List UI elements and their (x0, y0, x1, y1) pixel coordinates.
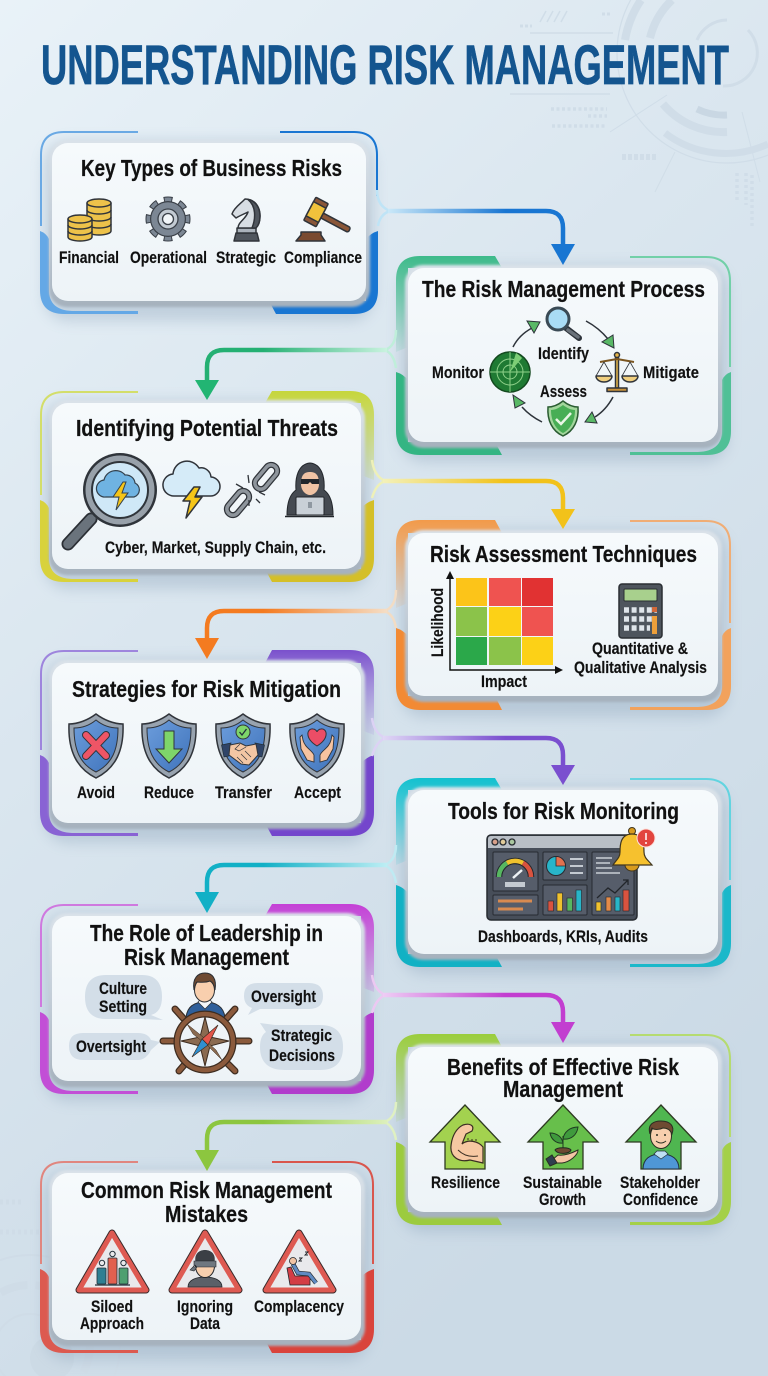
icon: magnifier (547, 308, 579, 338)
heading: Identifying Potential Threats (76, 415, 338, 441)
panel: common risk management mistakes (40, 1162, 374, 1360)
label: Compliance (284, 248, 362, 267)
heading: Management (503, 1076, 623, 1102)
arrow: threats to assessment (372, 460, 575, 529)
panel: key types of business risks (40, 132, 378, 321)
icon: scales (596, 352, 638, 392)
axis label: Impact (481, 672, 527, 691)
icon: broken chain (224, 462, 280, 518)
label: Mitigate (643, 363, 699, 382)
icon: avoid shield (69, 714, 123, 778)
label: Growth (539, 1190, 586, 1209)
icon: magnifier with storm cloud (68, 453, 157, 544)
icon: accept shield (290, 714, 344, 778)
heading: Benefits of Effective Risk (447, 1054, 679, 1080)
label: Ignoring (177, 1297, 233, 1316)
panel: risk assessment techniques (396, 520, 731, 717)
caption: Qualitative Analysis (574, 658, 707, 677)
heading: Risk Management (124, 944, 289, 970)
label: Transfer (215, 783, 272, 802)
label: Identify (538, 344, 589, 363)
heading: The Role of Leadership in (90, 920, 323, 946)
bubble: oversight: Oversight (251, 987, 316, 1006)
arrow: monitoring to leadership (195, 845, 396, 913)
label: Assess (540, 382, 587, 401)
icon: calculator (619, 584, 662, 638)
heading: Mistakes (165, 1201, 248, 1227)
icon: sustainable growth arrow (528, 1105, 598, 1169)
bubble: culture setting (85, 975, 163, 1020)
cycle arrows (513, 321, 614, 423)
label: Operational (130, 248, 207, 267)
label: Complacency (254, 1297, 344, 1316)
heading: The Risk Management Process (422, 276, 705, 302)
caption: Quantitative & (592, 639, 688, 658)
label: Accept (294, 783, 341, 802)
label: Financial (59, 248, 119, 267)
icon: reduce shield (142, 714, 196, 778)
heading: Strategies for Risk Mitigation (72, 676, 341, 702)
icon: dashboard (487, 835, 637, 920)
icon: complacency warning (266, 1233, 333, 1290)
label: Sustainable (523, 1173, 602, 1192)
bubble: culture setting: Culture (99, 979, 147, 998)
arrow: assessment to mitigation (195, 590, 396, 659)
arrow: risks to process (377, 190, 575, 265)
label: Siloed (91, 1297, 133, 1316)
heading: Tools for Risk Monitoring (448, 798, 679, 824)
panel: strategies for risk mitigation (40, 650, 374, 843)
icon: leader at ship wheel (163, 973, 249, 1071)
panel: benefits of effective risk management (396, 1034, 731, 1232)
icon: hacker (285, 463, 334, 516)
label: Strategic (216, 248, 276, 267)
decoration: bottom left tech circles (0, 1202, 120, 1376)
icon: chess knight (232, 199, 260, 241)
arrow: benefits to mistakes (195, 1102, 396, 1171)
bubble: culture setting: Setting (99, 997, 147, 1016)
label: Confidence (623, 1190, 698, 1209)
bubble: overtsight: Overtsight (76, 1037, 146, 1056)
heading: Key Types of Business Risks (81, 155, 342, 181)
icon: transfer shield (216, 714, 270, 778)
icon: gavel (296, 197, 356, 241)
arrow: leadership to benefits (372, 975, 575, 1043)
panel: tools for risk monitoring (396, 778, 731, 974)
icon: shield (548, 401, 578, 436)
label: Avoid (77, 783, 115, 802)
label: Data (190, 1314, 220, 1333)
panel: the role of leadership (40, 904, 374, 1101)
heading: Common Risk Management (81, 1177, 332, 1203)
label: Approach (80, 1314, 144, 1333)
icon: gear (145, 196, 191, 242)
label: Resilience (431, 1173, 500, 1192)
icon: radar (490, 352, 530, 392)
panel: the risk management process (396, 256, 731, 462)
bubble: overtsight (69, 1033, 160, 1060)
panel: identifying potential threats (40, 391, 374, 589)
label: Monitor (432, 363, 484, 382)
icon: coins (68, 199, 111, 241)
heading: Risk Assessment Techniques (430, 541, 697, 567)
bubble: strategic decisions (260, 1023, 343, 1070)
decoration: top right tech circles (510, 0, 768, 228)
icon: alert bell (613, 828, 655, 871)
label: Stakeholder (620, 1173, 700, 1192)
bubble: strategic decisions: Strategic (271, 1026, 332, 1045)
bubble: oversight (244, 983, 323, 1015)
icon: siloed approach warning (79, 1233, 146, 1290)
icon: stakeholder confidence arrow (626, 1105, 696, 1169)
arrow: process to threats (195, 330, 396, 400)
arrow: mitigation to monitoring (372, 718, 575, 785)
caption: Dashboards, KRIs, Audits (478, 927, 648, 946)
bubble: strategic decisions: Decisions (269, 1046, 335, 1065)
icon: resilience arrow (430, 1105, 500, 1169)
chart: risk matrix (446, 571, 563, 674)
caption: Cyber, Market, Supply Chain, etc. (105, 538, 326, 557)
label: Reduce (144, 783, 194, 802)
icon: ignoring data warning (172, 1233, 239, 1290)
icon: cloud and lightning (163, 461, 220, 518)
axis label: Likelihood (428, 588, 447, 657)
